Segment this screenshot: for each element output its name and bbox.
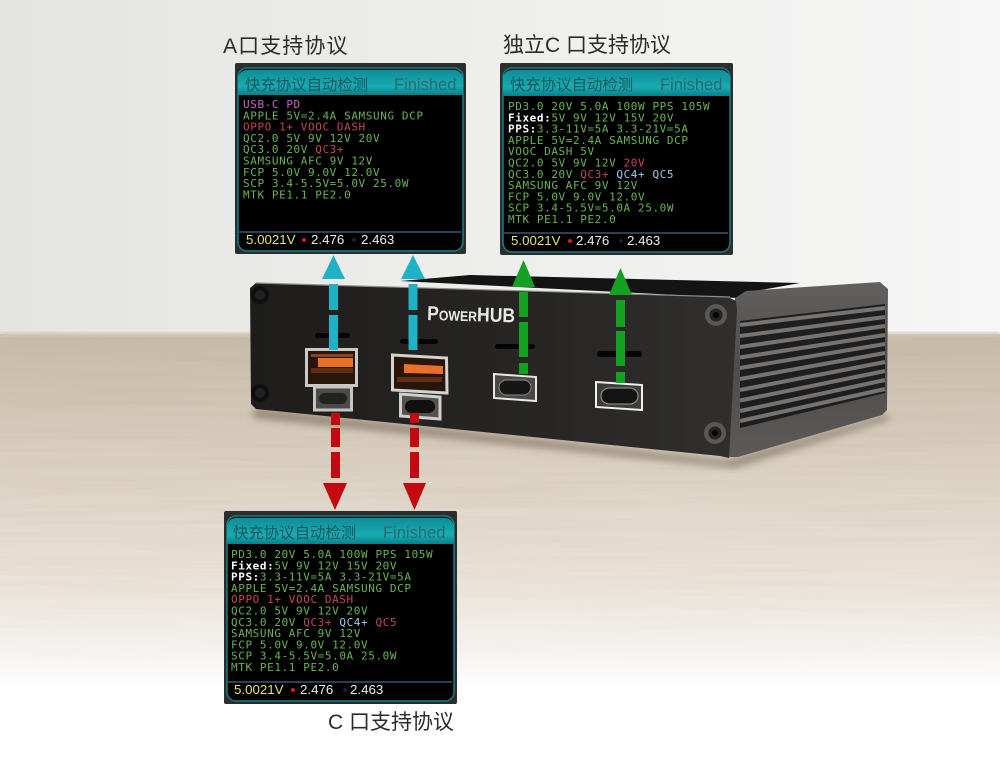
protocol list: VOOC DASH 5V (508, 145, 595, 158)
protocol list: MTK PE1.1 PE2.0 (231, 661, 339, 674)
protocol list: MTK PE1.1 PE2.0 (508, 213, 616, 226)
protocol list: SCP 3.4-5.5V=5.0A 25.0W (508, 202, 674, 215)
protocol list: QC2.0 5V 9V 12V 20V (508, 156, 645, 170)
panel: C port protocols screen (224, 511, 457, 704)
protocol list: QC3.0 20V QC3+ QC4+ QC5 (231, 616, 397, 629)
protocol list: FCP 5.0V 9.0V 12.0V (243, 166, 380, 179)
protocol list: QC2.0 5V 9V 12V 20V (243, 132, 380, 145)
protocol list: SAMSUNG AFC 9V 12V (243, 154, 373, 168)
protocol list (508, 100, 710, 226)
port: USB-C middle (400, 394, 440, 419)
protocol list: USB-C PD (243, 98, 301, 111)
panel: A port protocols screen (235, 63, 466, 254)
readings: 2.476 (576, 233, 609, 248)
readings: 2.476 (300, 682, 333, 697)
readings: 2.463 (350, 682, 383, 697)
protocol list: SAMSUNG AFC 9V 12V (231, 627, 361, 640)
protocol list: APPLE 5V=2.4A SAMSUNG DCP (231, 582, 412, 595)
screen header: Finished (660, 76, 722, 94)
heading: C port: C 口支持协议 (328, 711, 454, 734)
protocol list: SCP 3.4-5.5V=5.0V 25.0W (243, 177, 409, 190)
screen header: 快充协议自动检测 (233, 524, 356, 542)
protocol list: APPLE 5V=2.4A SAMSUNG DCP (243, 109, 424, 122)
readings: 2.476 (311, 232, 344, 247)
arrow: red left (323, 413, 347, 510)
readings (228, 682, 452, 697)
port: USB-C third (494, 374, 536, 401)
logo: PowerHUB: POWERHUB (427, 303, 515, 327)
arrow: green fourth port (609, 268, 632, 383)
front panel (250, 283, 737, 458)
panel: standalone C port protocols screen (500, 63, 733, 255)
readings: 2.463 (361, 232, 394, 247)
port: USB-A left (306, 350, 356, 386)
screws (251, 286, 727, 444)
readings: 5.0021V (246, 232, 296, 247)
protocol list: Fixed:5V 9V 12V 15V 20V (508, 111, 674, 124)
protocol list: SAMSUNG AFC 9V 12V (508, 179, 638, 192)
device shadow (252, 408, 888, 468)
indicator slots (315, 333, 642, 357)
readings: 5.0021V (234, 682, 284, 697)
protocol list: OPPO 1+ VOOC DASH (243, 121, 366, 134)
arrow: red middle (403, 413, 426, 510)
arrow: green third port (512, 260, 535, 374)
readings (504, 233, 728, 248)
protocol list: QC3.0 20V QC3+ QC4+ QC5 (508, 168, 674, 181)
protocol list: PD3.0 20V 5.0A 100W PPS 105W (508, 100, 710, 113)
port: USB-C fourth (596, 382, 642, 410)
screen header: 快充协议自动检测 (510, 76, 633, 94)
protocol list: PPS:3.3-11V=5A 3.3-21V=5A (508, 123, 689, 136)
protocol list (231, 548, 433, 674)
device: PowerHUB enclosure (250, 275, 888, 468)
screen header: 快充协议自动检测 (245, 76, 368, 94)
protocol list: PD3.0 20V 5.0A 100W PPS 105W (231, 548, 433, 561)
screen header: Finished (383, 524, 445, 542)
protocol list: FCP 5.0V 9.0V 12.0V (231, 638, 368, 651)
screen header (227, 518, 454, 544)
protocol list: OPPO 1+ VOOC DASH (231, 593, 354, 606)
readings: 5.0021V (511, 233, 561, 248)
side panel with ribs (727, 282, 888, 457)
port: USB-C left (314, 387, 352, 410)
protocol list: SCP 3.4-5.5V=5.0A 25.0W (231, 650, 397, 663)
protocol list: Fixed:5V 9V 12V 15V 20V (231, 559, 397, 572)
screen header (238, 70, 463, 95)
top surface (400, 275, 800, 298)
protocol list (243, 98, 424, 201)
protocol list: PPS:3.3-11V=5A 3.3-21V=5A (231, 571, 412, 584)
protocol list: QC3.0 20V QC3+ (243, 143, 344, 156)
screen header: Finished (394, 76, 456, 94)
arrow: teal middle (401, 255, 425, 350)
arrow: teal left (322, 255, 345, 350)
protocol list: APPLE 5V=2.4A SAMSUNG DCP (508, 134, 689, 147)
protocol list: FCP 5.0V 9.0V 12.0V (508, 190, 645, 203)
readings: 2.463 (627, 233, 660, 248)
heading: A port: A口支持协议 (223, 35, 349, 58)
readings (239, 232, 461, 247)
protocol list: MTK PE1.1 PE2.0 (243, 188, 351, 201)
heading: standalone C port: 独立C 口支持协议 (503, 34, 671, 57)
screen header (503, 70, 730, 96)
port: USB-A middle (392, 355, 447, 393)
protocol list: QC2.0 5V 9V 12V 20V (231, 604, 368, 618)
